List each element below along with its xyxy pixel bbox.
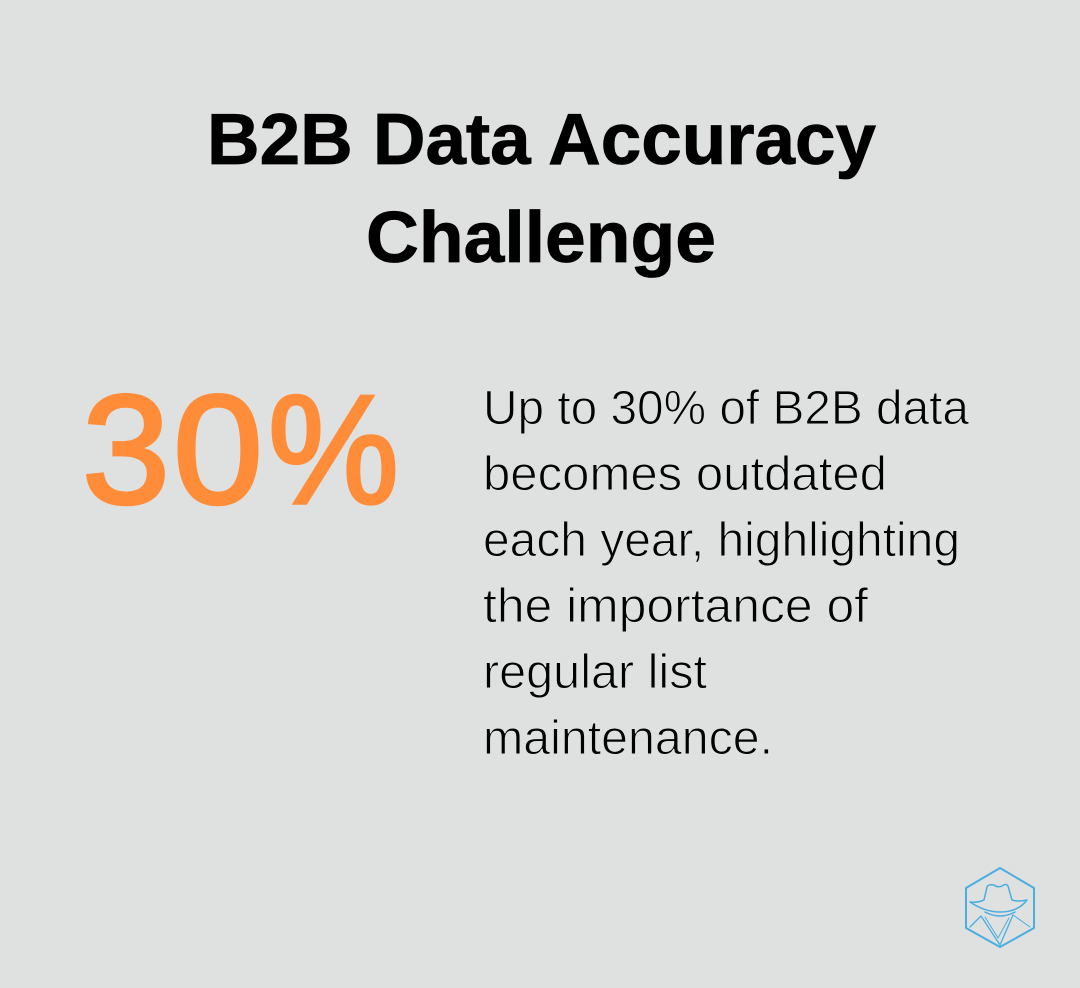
description text: maintenance. <box>483 712 773 765</box>
title: Challenge <box>366 198 716 278</box>
description text: regular list <box>483 646 707 699</box>
description text: Up to 30% of B2B data <box>483 382 969 435</box>
description text: the importance of <box>483 580 869 633</box>
big statistic: 30% <box>82 363 399 536</box>
big statistic: 30%: 0 <box>173 363 263 536</box>
icon: hexagon spy logo <box>966 868 1034 947</box>
big statistic: 30%: 3 <box>82 363 170 536</box>
title: B2B Data Accuracy <box>207 100 876 180</box>
title <box>207 100 876 278</box>
description text: becomes outdated <box>483 448 887 501</box>
description text: each year, highlighting <box>483 514 960 567</box>
big statistic: 30%: % <box>268 363 399 536</box>
description text <box>483 382 969 765</box>
